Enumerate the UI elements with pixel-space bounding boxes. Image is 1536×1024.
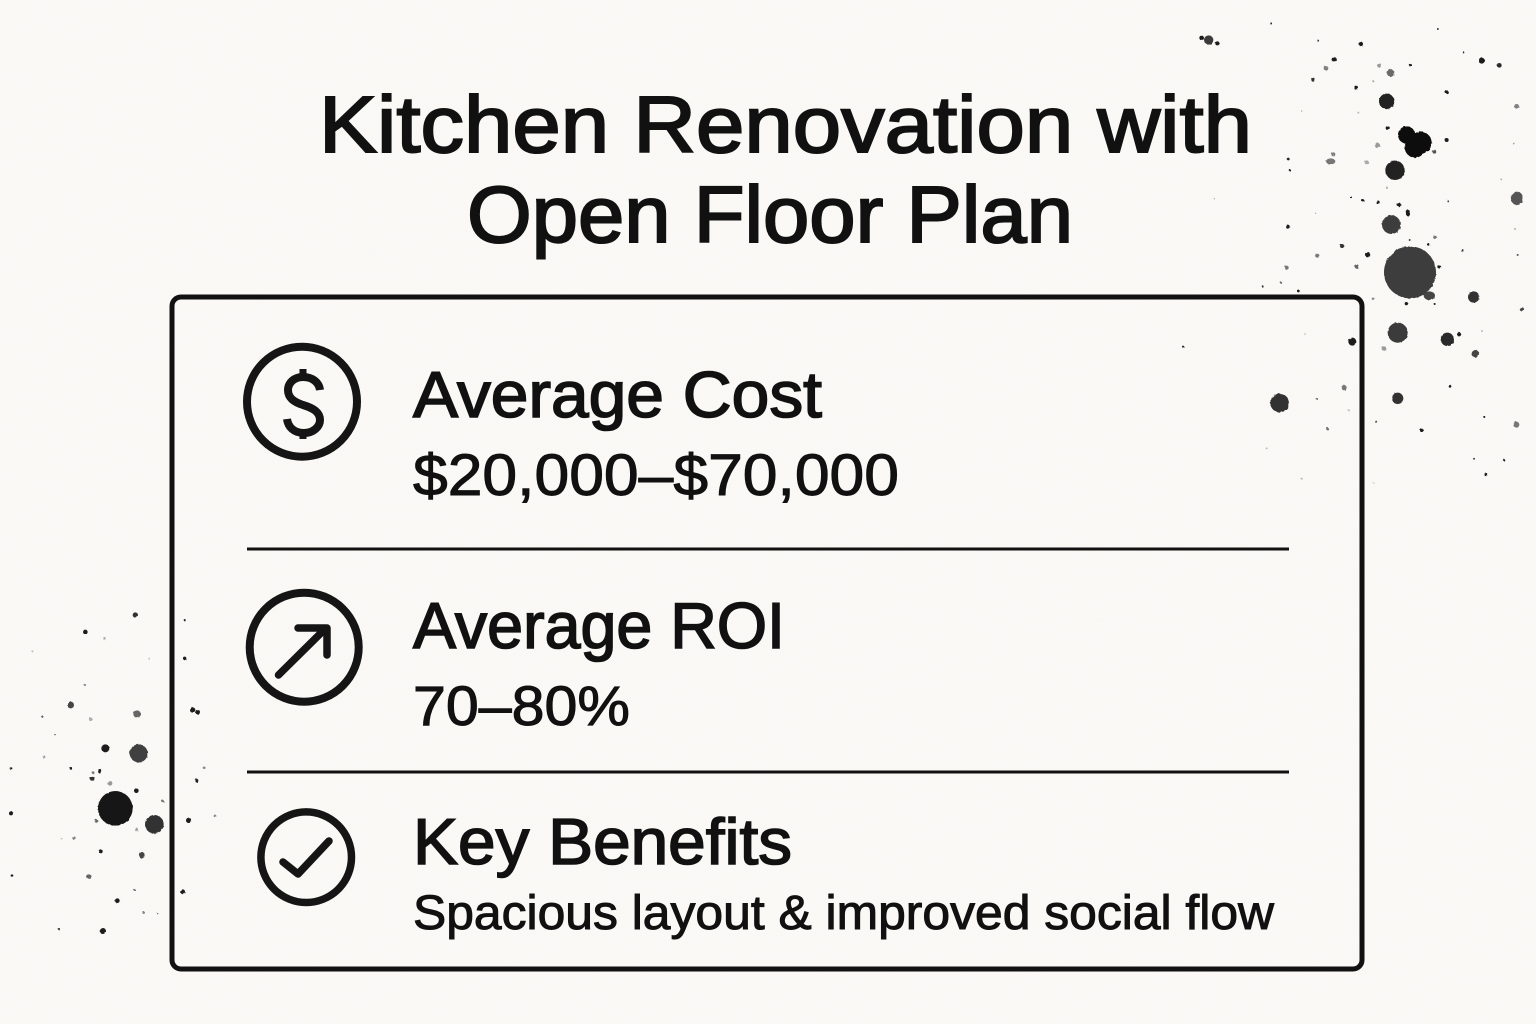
row: average ROI: [250, 589, 785, 737]
row: average cost: [247, 347, 899, 508]
ink splatter: lower left: [9, 612, 216, 934]
icon: dollar sign in circle: [247, 347, 357, 457]
row: key benefits: [261, 805, 1274, 940]
heading: key benefits: Key Benefits: [413, 805, 792, 878]
value: benefits description: Spacious layout & improved social flow: [413, 887, 1274, 940]
title: Kitchen Renovation with: [319, 80, 1252, 169]
panel: summary card: [172, 297, 1362, 969]
icon: check mark in circle: [261, 812, 352, 902]
ink splatter: right side: [1182, 246, 1524, 484]
heading: average ROI: Average ROI: [413, 589, 785, 662]
title: [319, 80, 1252, 259]
title: Open Floor Plan: [467, 170, 1073, 259]
ink splatter: top right: [1199, 22, 1523, 270]
icon: upward arrow in circle: [250, 593, 359, 702]
value: cost range: $20,000–$70,000: [413, 443, 899, 508]
heading: average cost: Average Cost: [413, 358, 822, 431]
value: ROI range: 70–80%: [413, 674, 630, 737]
